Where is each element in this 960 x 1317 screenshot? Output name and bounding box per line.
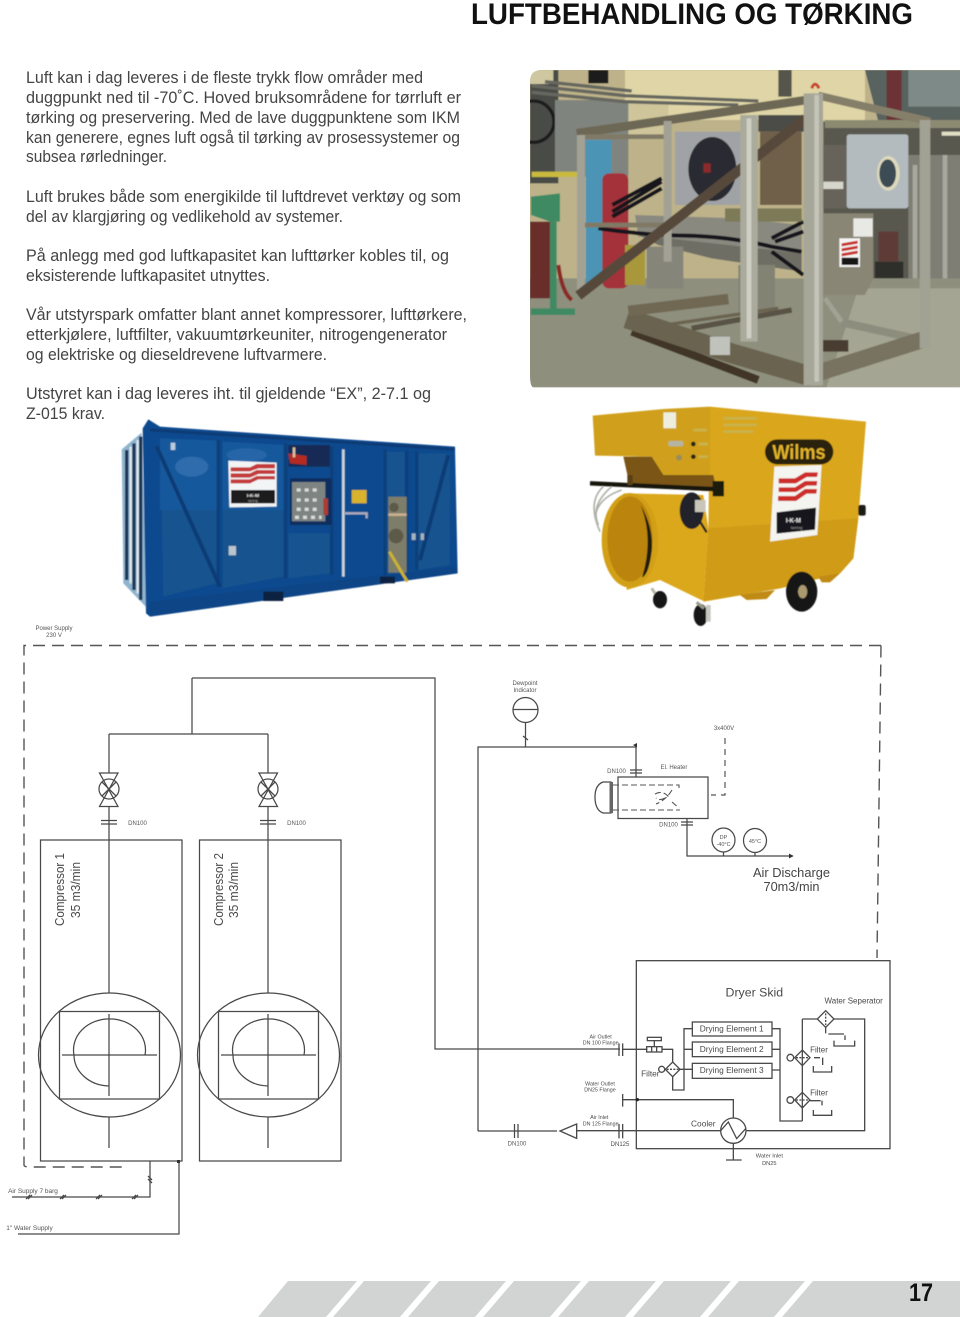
paragraph 1: [26, 69, 461, 166]
paragraph 1: subsea rørledninger.: [26, 148, 167, 166]
flanges and labels: [583, 1035, 783, 1167]
electric heater: El. Heater: [661, 765, 687, 771]
heater body: [703, 407, 866, 602]
air and water supply lines: 1" Water Supply: [6, 1225, 53, 1232]
I-K-M plate: tørring: [791, 525, 802, 530]
dewpoint indicator: [512, 681, 538, 747]
process flow diagram: [6, 626, 890, 1234]
compressor 1 label: 35 m3/min: [69, 862, 83, 918]
paragraph 5: Z-015 krav.: [26, 405, 105, 423]
skid piping: [577, 1019, 865, 1160]
photo: dryer skid in steel frame: [513, 65, 960, 395]
compressor 2 label: 35 m3/min: [227, 862, 241, 918]
compressor 2 label: [212, 853, 241, 926]
air discharge label: Air Discharge: [753, 866, 830, 880]
valve 1: [99, 773, 119, 806]
flanges and labels: DN 125 Flange: [583, 1121, 619, 1127]
logo plate: tørring: [248, 499, 258, 503]
paragraph 1: duggpunkt ned til -70˚C. Hoved bruksområdene for tørrluft er: [26, 89, 461, 107]
pipe size labels: DN100: [128, 821, 147, 827]
Wilms logo: Wilms: [772, 442, 826, 464]
paragraph 5: Utstyret kan i dag leveres iht. til gjeldende “EX”, 2-7.1 og: [26, 385, 431, 403]
gauges: 45°C: [749, 839, 761, 845]
electric heater: DN100: [659, 822, 678, 828]
paragraph 1: tørking og preservering. Med de lave duggpunktene som IKM: [26, 109, 460, 127]
pipe size labels: [128, 821, 306, 827]
paragraph 2: [26, 188, 461, 226]
paragraph 4: og elektriske og dieseldrevene luftvarmere.: [26, 346, 327, 364]
electric heater: [595, 765, 794, 858]
compressor 1 label: Compressor 1: [53, 853, 67, 926]
container left end: [122, 433, 147, 608]
paragraph 2: del av klargjøring og vedlikehold av systemer.: [26, 208, 343, 226]
pipe size labels: DN100: [287, 821, 306, 827]
photo: yellow Wilms air heater: [590, 407, 866, 626]
photo: blue dryer container: [122, 419, 458, 617]
outlet and inlet piping to skid: [478, 1124, 557, 1148]
paragraph 3: eksisterende luftkapasitet utnyttes.: [26, 267, 270, 285]
400V supply: 3x400V: [714, 726, 734, 732]
flanges and labels: DN25: [762, 1161, 777, 1167]
air and water supply lines: [6, 1160, 180, 1234]
dryer skid: [560, 961, 890, 1167]
cooler: [691, 1118, 746, 1143]
compressor 1: [38, 807, 182, 1161]
wheels: [652, 572, 817, 626]
drying elements: [692, 1022, 772, 1078]
power supply label: [35, 626, 73, 639]
filter upper right: Filter: [810, 1046, 828, 1055]
power supply label: 230 V: [46, 633, 62, 639]
400V supply: [711, 726, 734, 795]
drying elements: Drying Element 3: [700, 1065, 764, 1075]
filter upper right: [787, 1046, 832, 1072]
flanges and labels: DN125: [611, 1142, 630, 1148]
water separator label: Water Seperator: [825, 996, 883, 1005]
paragraph 4: etterkjølere, luftfilter, vakuumtørkeuniter, nitrogengenerator: [26, 326, 447, 344]
filter lower right: Filter: [810, 1088, 828, 1097]
footer band: [258, 1281, 960, 1317]
filter lower right: [787, 1088, 832, 1115]
valve 2: [258, 773, 278, 806]
flanges and labels: DN 100 Flange: [583, 1040, 619, 1046]
power supply label: Power Supply: [35, 626, 73, 632]
body text: [26, 69, 467, 423]
compressor 2: [198, 807, 341, 1161]
I-K-M plate: [770, 465, 822, 542]
gauges: -40°C: [716, 842, 731, 848]
paragraph 1: Luft kan i dag leveres i de fleste trykk flow områder med: [26, 69, 423, 87]
inlet cone: [560, 1124, 577, 1138]
gauges: DP: [720, 835, 728, 841]
air discharge label: [753, 866, 830, 894]
compressor piping: [109, 678, 620, 1049]
flanges and labels: Air Outlet: [590, 1035, 612, 1041]
drying elements: Drying Element 1: [700, 1024, 764, 1034]
compressor 2 label: Compressor 2: [212, 853, 226, 926]
dashed power boundary: [24, 646, 881, 1167]
drying elements: Drying Element 2: [700, 1044, 764, 1054]
air and water supply lines: Air Supply 7 barg: [8, 1188, 58, 1195]
logo on electric box: [839, 238, 860, 267]
paragraph 4: Vår utstyrspark omfatter blant annet kompressorer, lufttørkere,: [26, 306, 467, 324]
flanges: [101, 820, 276, 824]
dryer skid title: Dryer Skid: [726, 986, 783, 1000]
filter left: Filter: [641, 1069, 660, 1079]
paragraph 3: [26, 247, 449, 285]
compressor 1 label: [53, 853, 83, 926]
arrow head: [633, 743, 637, 748]
shutoff valve: [647, 1037, 662, 1052]
paragraph 1: kan generere, egnes luft også til tørking av prosessystemer og: [26, 129, 460, 147]
paragraph 2: Luft brukes både som energikilde til luftdrevet verktøy og som: [26, 188, 461, 206]
filter left: [641, 1062, 680, 1079]
outlet and inlet piping to skid: DN100: [508, 1142, 527, 1148]
flanges and labels: Water Outlet: [585, 1081, 615, 1087]
I-K-M plate: I-K-M: [786, 518, 801, 524]
flanges and labels: Air Inlet: [590, 1115, 609, 1121]
cooler: Cooler: [691, 1119, 716, 1129]
paragraph 3: På anlegg med god luftkapasitet kan lufttørker kobles til, og: [26, 247, 449, 265]
dewpoint indicator: Dewpoint: [512, 681, 538, 687]
main air line to heater: [478, 747, 636, 1131]
electric heater: DN100: [607, 769, 626, 775]
flanges and labels: Water Inlet: [756, 1153, 783, 1159]
dewpoint indicator: Indicator: [513, 688, 537, 694]
paragraph 4: [26, 306, 467, 364]
logo plate: [228, 461, 277, 507]
page number: 17: [909, 1279, 933, 1307]
logo plate: I-K-M: [247, 493, 259, 499]
air discharge label: 70m3/min: [764, 880, 820, 894]
flanges and labels: DN25 Flange: [584, 1088, 616, 1094]
paragraph 5: [26, 385, 431, 423]
gauges: [712, 828, 766, 856]
water separator: [817, 1011, 855, 1046]
